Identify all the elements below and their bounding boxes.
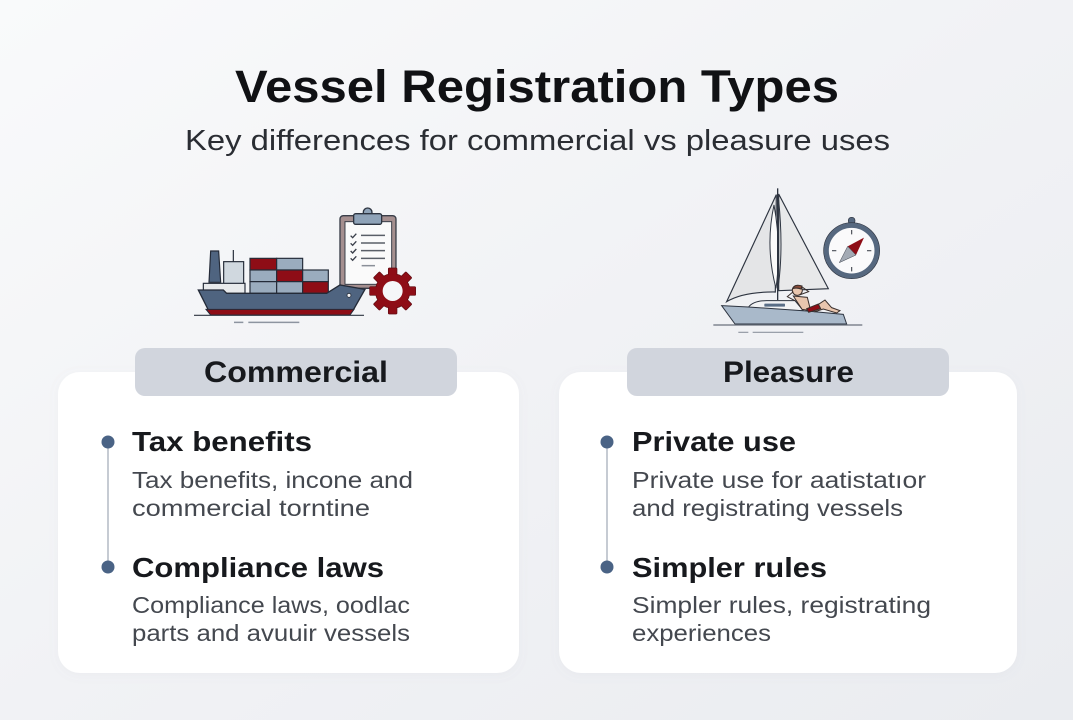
item: simpler rules: experiences	[632, 620, 771, 646]
card	[58, 372, 519, 673]
timeline	[600, 436, 614, 574]
pleasure tab	[627, 348, 949, 396]
superstructure	[203, 250, 245, 293]
clipboard	[340, 208, 396, 288]
containers	[250, 258, 328, 293]
item: compliance laws	[132, 552, 410, 646]
waterline	[194, 314, 364, 317]
item: compliance laws: Compliance laws	[132, 552, 384, 583]
item: simpler rules: Simpler rules	[632, 552, 827, 583]
item: simpler rules	[632, 552, 931, 646]
item: tax benefits: Tax benefits	[132, 426, 312, 457]
hull	[722, 306, 847, 324]
item: private use: Private use for aatistatıor	[632, 467, 926, 493]
item: compliance laws: Compliance laws, oodlac	[132, 592, 410, 618]
person	[787, 285, 840, 313]
item: tax benefits: Tax benefits, incone and	[132, 467, 413, 493]
icon: cargo ship with clipboard and gear	[194, 208, 416, 322]
gear	[370, 268, 416, 314]
item: private use: and registrating vessels	[632, 495, 903, 521]
item: tax benefits	[132, 426, 413, 521]
item: simpler rules: Simpler rules, registrating	[632, 592, 931, 618]
item: private use: Private use	[632, 426, 796, 457]
waterline	[713, 323, 862, 327]
pleasure tab: Pleasure	[723, 356, 854, 389]
item: compliance laws: parts and avuuir vessels	[132, 620, 410, 646]
icon: sailboat with relaxing person and compass	[713, 188, 880, 332]
title: Vessel Registration Types	[235, 61, 839, 112]
panel: commercial	[58, 348, 519, 673]
subtitle: Key differences for commercial vs pleasure uses	[185, 125, 890, 157]
card	[559, 372, 1017, 673]
mainsail	[779, 194, 828, 291]
item: private use	[632, 426, 926, 521]
commercial tab	[135, 348, 457, 396]
commercial tab: Commercial	[204, 356, 388, 389]
jib	[727, 195, 776, 302]
compass	[824, 217, 880, 279]
hull	[198, 285, 365, 310]
timeline	[102, 436, 114, 574]
deck	[748, 301, 803, 311]
panel: pleasure	[559, 348, 1017, 673]
item: tax benefits: commercial torntine	[132, 495, 370, 521]
mast and centre sail	[770, 205, 778, 288]
